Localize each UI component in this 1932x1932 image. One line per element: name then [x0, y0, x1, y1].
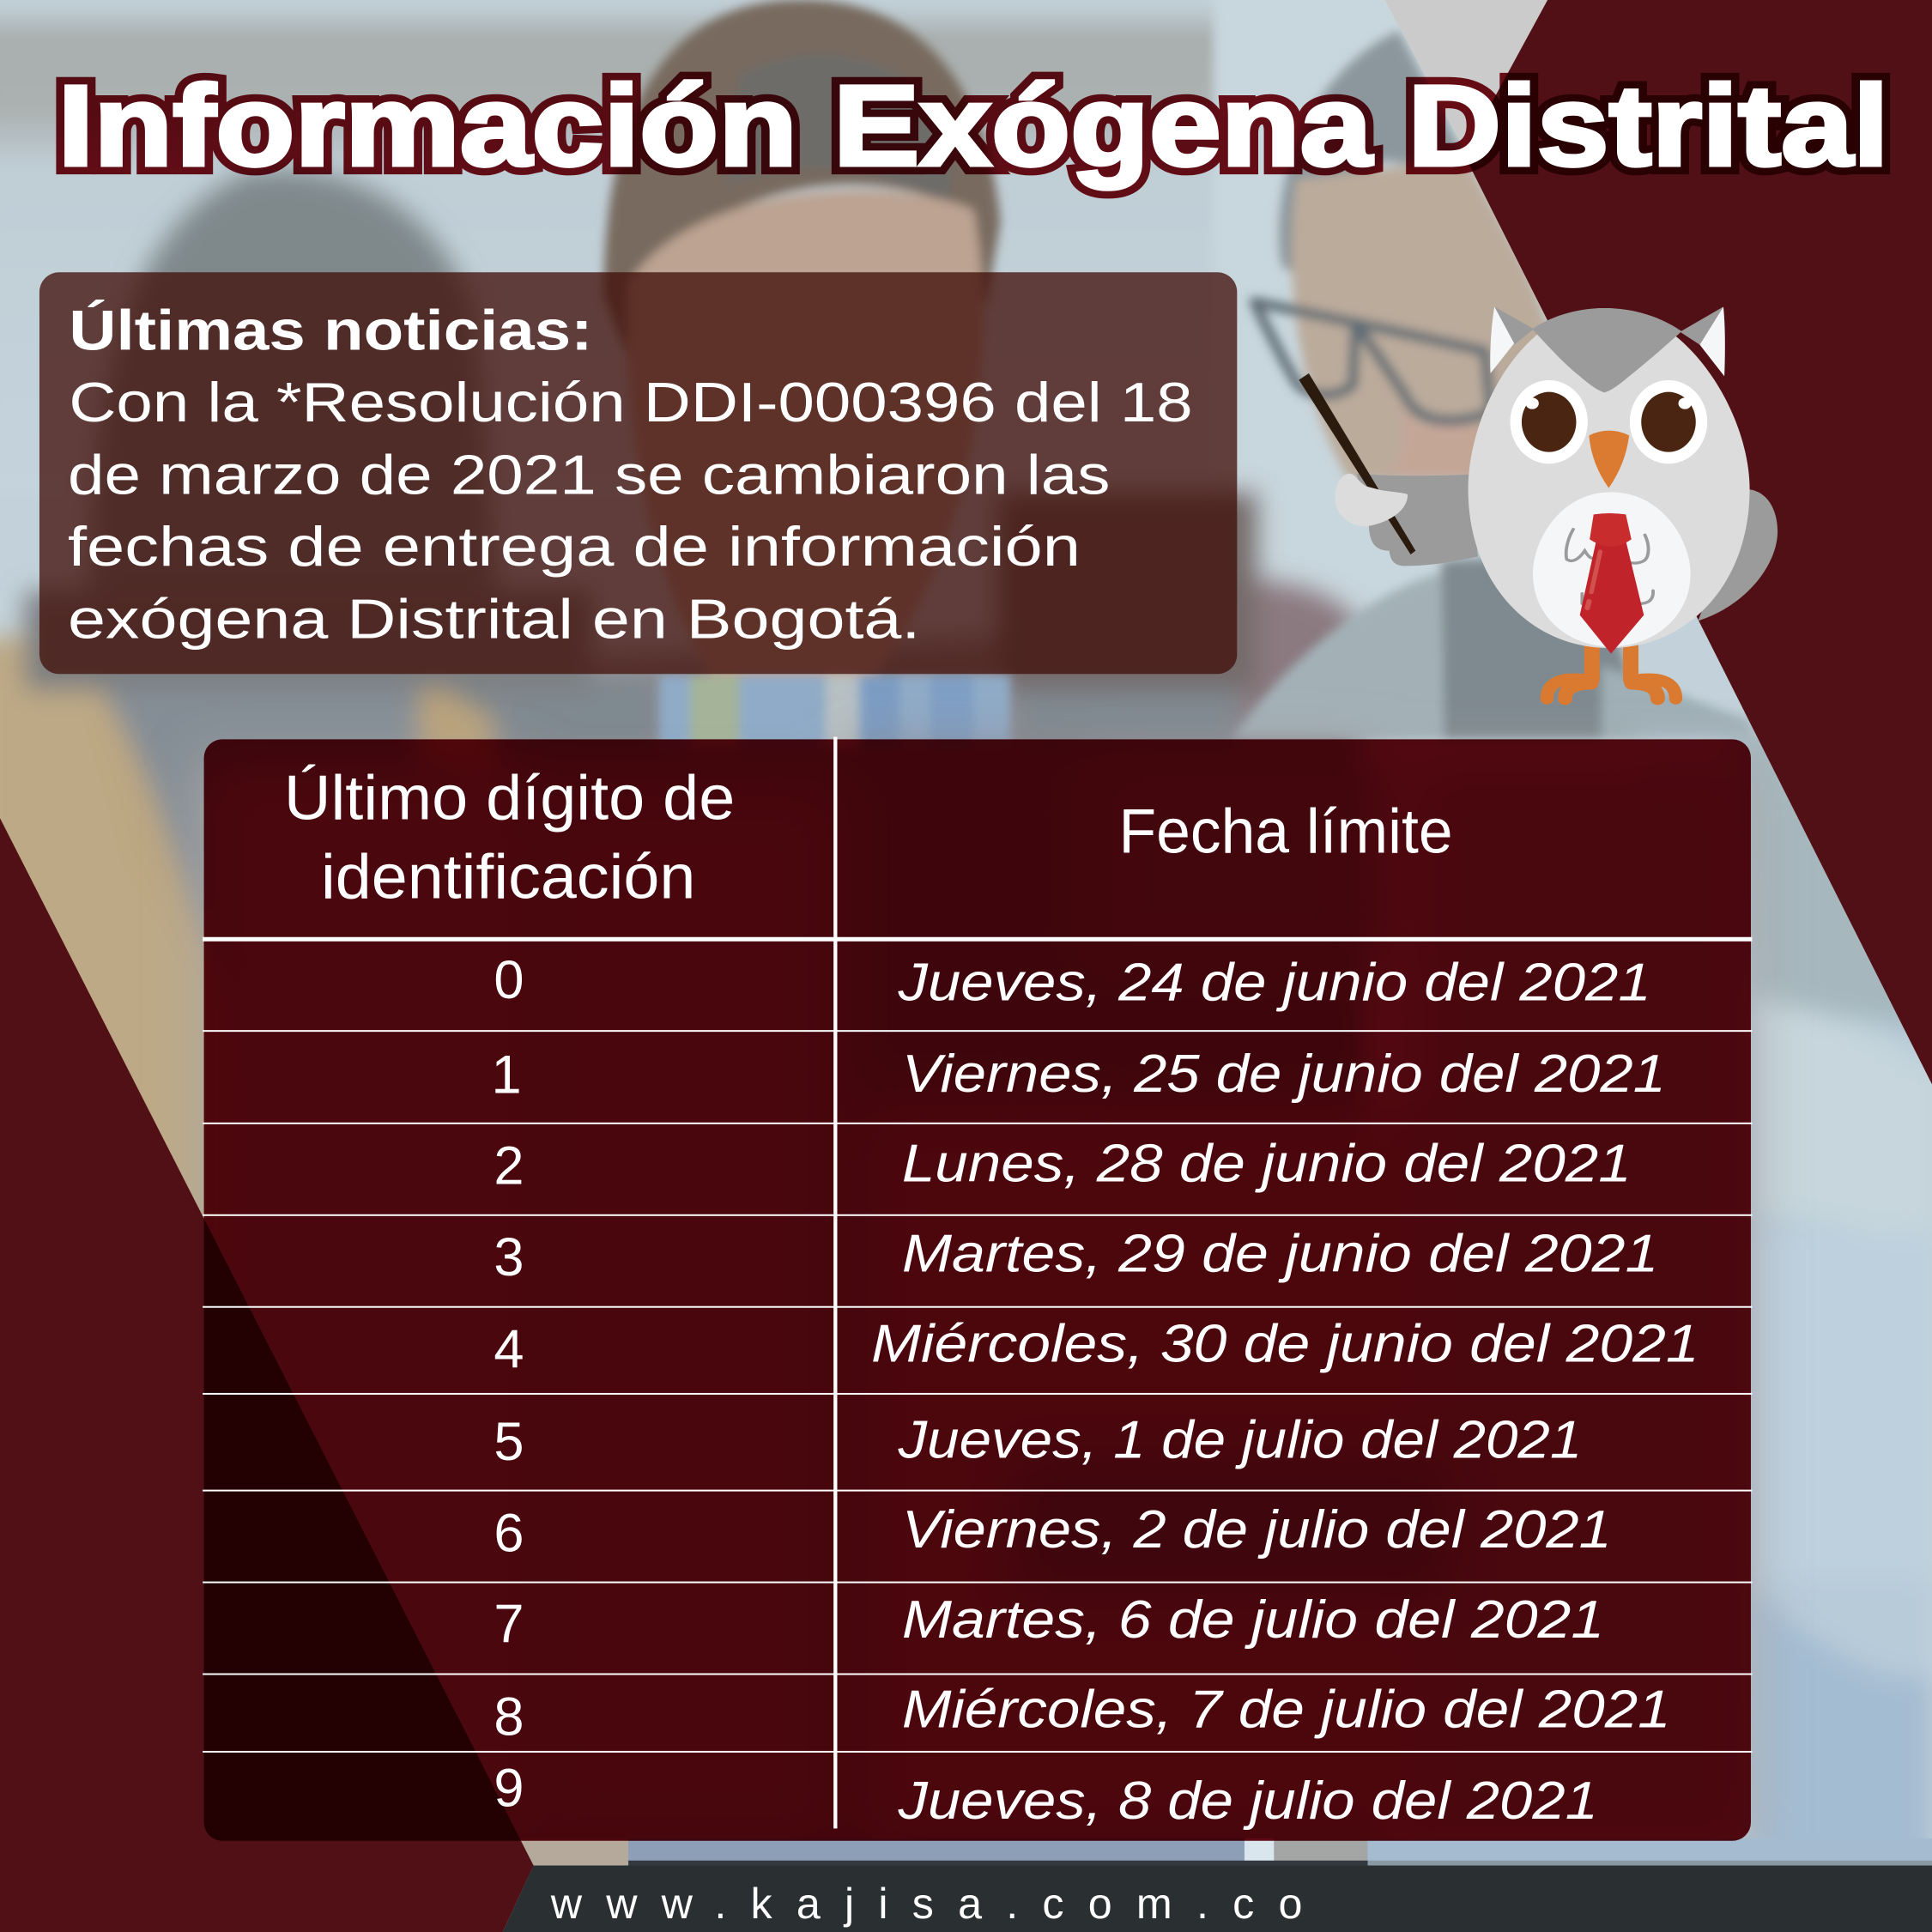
heading: últimas noticias: Últimas noticias: — [69, 299, 593, 362]
date column values: Lunes, 28 de junio del 2021 — [902, 1135, 1632, 1194]
date column values: Miércoles, 30 de junio del 2021 — [871, 1314, 1699, 1373]
news text — [68, 372, 1193, 651]
digit column values: 8 — [494, 1687, 524, 1747]
table header: digit column: Último dígito de — [284, 763, 735, 833]
man hair and face — [603, 0, 1001, 357]
date column values: Viernes, 2 de julio del 2021 — [902, 1500, 1612, 1560]
owl body — [1469, 308, 1750, 648]
title: Información Exógena Distrital — [58, 62, 1889, 190]
table panel — [204, 739, 1751, 1841]
digit column values: 5 — [494, 1412, 524, 1472]
grey triangle top right — [1385, 0, 1547, 154]
maroon panel bottom left — [0, 818, 534, 1932]
right woman hair, face, glasses and top — [1279, 31, 1473, 283]
strip below table — [518, 1838, 628, 1865]
table header: digit column: identificación — [321, 842, 695, 912]
right woman glasses — [1254, 302, 1491, 421]
table: digit and deadline — [203, 736, 1752, 1841]
digit column values: 4 — [494, 1320, 524, 1380]
table grid lines — [203, 736, 1752, 1828]
digit column values: 7 — [494, 1595, 524, 1655]
digit column values — [491, 950, 524, 1819]
footer website: www.kajisa.com.co — [550, 1880, 1302, 1928]
digit column values: 3 — [494, 1227, 524, 1287]
owl left wing — [1356, 474, 1478, 566]
digit column values: 9 — [494, 1759, 524, 1819]
man jacket and body — [493, 616, 1380, 1885]
plaid scarf — [659, 675, 1010, 749]
reddish tones behind table — [203, 752, 1750, 1848]
owl eyes — [1511, 380, 1707, 463]
owl belly feathers — [1566, 530, 1653, 603]
owl legs and feet — [1547, 644, 1675, 699]
right coat — [1638, 739, 1932, 1932]
digit column values: 1 — [491, 1045, 522, 1105]
date column values — [871, 954, 1699, 1831]
date column values: Martes, 29 de junio del 2021 — [902, 1225, 1658, 1284]
footer bar — [503, 1865, 1932, 1932]
news text: fechas de entrega de información — [68, 516, 1081, 578]
owl ears — [1490, 306, 1725, 376]
news text: exógena Distrital en Bogotá. — [68, 589, 920, 651]
panel: latest news — [39, 272, 1237, 674]
digit column values: 6 — [494, 1503, 524, 1563]
news text: de marzo de 2021 se cambiaron las — [68, 445, 1110, 506]
pointer stick — [1299, 373, 1415, 554]
digit column values: 0 — [494, 950, 524, 1010]
title: Información Exógena Distrital — [58, 62, 1889, 190]
maroon panel right — [1463, 0, 1932, 1084]
news text: Con la *Resolución DDI-000396 del 18 — [69, 372, 1193, 433]
owl red tie — [1580, 513, 1644, 654]
table header: date column: Fecha límite — [1119, 796, 1453, 866]
icon: owl mascot with tie and pointer — [1299, 306, 1778, 699]
date column values: Viernes, 25 de junio del 2021 — [902, 1045, 1666, 1104]
owl beak — [1589, 431, 1629, 488]
date column values: Jueves, 1 de julio del 2021 — [897, 1410, 1582, 1469]
digit column values: 2 — [494, 1136, 524, 1196]
date column values: Jueves, 24 de junio del 2021 — [897, 954, 1651, 1013]
date column values: Miércoles, 7 de julio del 2021 — [902, 1681, 1671, 1740]
date column values: Martes, 6 de julio del 2021 — [902, 1590, 1604, 1650]
table header: digit column — [284, 763, 735, 912]
owl head cap — [1532, 308, 1681, 392]
owl belly — [1533, 492, 1691, 646]
left woman hair and jacket — [90, 170, 518, 764]
owl right wing — [1698, 489, 1778, 621]
owl hand — [1335, 474, 1408, 526]
date column values: Jueves, 8 de julio del 2021 — [897, 1772, 1598, 1831]
